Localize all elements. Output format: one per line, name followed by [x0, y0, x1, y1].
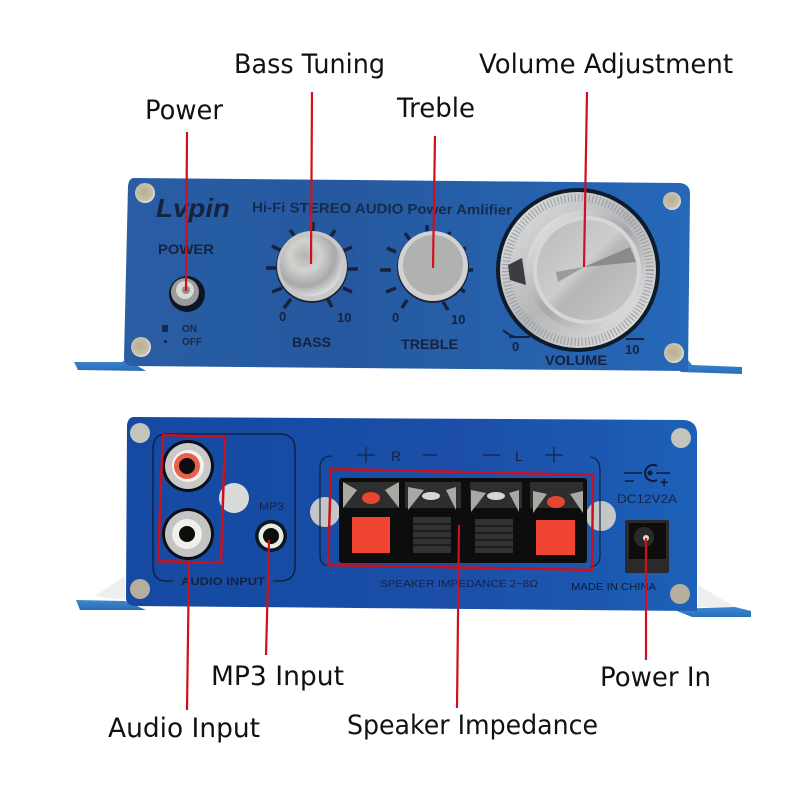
power switch: POWER	[158, 241, 214, 257]
volume knob: 0	[512, 339, 519, 354]
callout: red box speaker	[328, 469, 593, 570]
RCA socket: red	[162, 440, 214, 492]
screws: rear	[130, 423, 691, 604]
terminal 1	[343, 482, 399, 553]
power jack	[571, 520, 669, 593]
callout: MP3 Input: MP3 Input	[211, 661, 344, 692]
product title: Hi-Fi STEREO AUDIO Power Amlifier	[252, 199, 513, 218]
callout: red box audio input	[158, 435, 225, 563]
callout: MP3 Input	[211, 540, 344, 692]
treble knob: 10	[451, 312, 465, 327]
power switch	[158, 241, 214, 348]
volume knob: VOLUME	[545, 352, 607, 368]
bass knob: BASS	[292, 334, 331, 350]
front faceplate	[124, 178, 690, 371]
volume knob	[496, 188, 660, 368]
callout: Power: Power	[145, 95, 224, 126]
terminal 4	[530, 482, 583, 555]
brand logo: Lvpin	[156, 193, 230, 223]
callout: Power In: Power In	[600, 662, 711, 693]
power jack: MADE IN CHINA	[571, 581, 656, 593]
DC power symbol and label	[617, 465, 677, 506]
speaker outline and markings: L	[515, 448, 523, 464]
callout: Volume Adjustment: Volume Adjustment	[479, 49, 733, 80]
front mounting flanges	[74, 359, 742, 374]
speaker outline and markings: SPEAKER IMPEDANCE 2~8Ω	[380, 578, 538, 590]
audio input outline and label	[153, 434, 295, 588]
panel: amplifier front	[74, 178, 742, 374]
treble knob: 0	[392, 310, 399, 325]
screws: front	[131, 183, 684, 363]
speaker terminal block	[339, 478, 587, 563]
treble knob	[380, 225, 473, 352]
callout: Speaker Impedance: Speaker Impedance	[347, 710, 598, 741]
treble knob: TREBLE	[401, 336, 458, 352]
DC power symbol and label: DC12V2A	[617, 492, 677, 506]
power switch: ON	[182, 324, 197, 335]
RCA socket: white	[162, 508, 214, 560]
audio input outline and label: AUDIO INPUT	[181, 576, 265, 588]
callout: Volume Adjustment	[479, 49, 733, 267]
callout: Treble: Treble	[396, 93, 475, 124]
volume knob: 10	[625, 342, 639, 357]
speaker outline and markings: R	[391, 448, 401, 464]
DC power symbol and label: +	[660, 474, 668, 490]
MP3 jack: MP3	[259, 501, 284, 513]
panel: amplifier back	[76, 417, 751, 617]
bass knob: 10	[337, 310, 351, 325]
rear mounting flanges	[76, 576, 751, 617]
bass knob: 0	[279, 309, 286, 324]
callout: Audio Input: Audio Input	[108, 713, 260, 744]
callout: Bass Tuning: Bass Tuning	[234, 49, 385, 80]
terminal 2	[405, 482, 461, 553]
power switch: OFF	[182, 337, 202, 348]
rear faceplate	[126, 417, 697, 611]
bass knob	[266, 222, 358, 350]
MP3 jack	[255, 501, 287, 552]
speaker outline and markings	[320, 447, 600, 590]
terminal 3	[470, 482, 522, 553]
